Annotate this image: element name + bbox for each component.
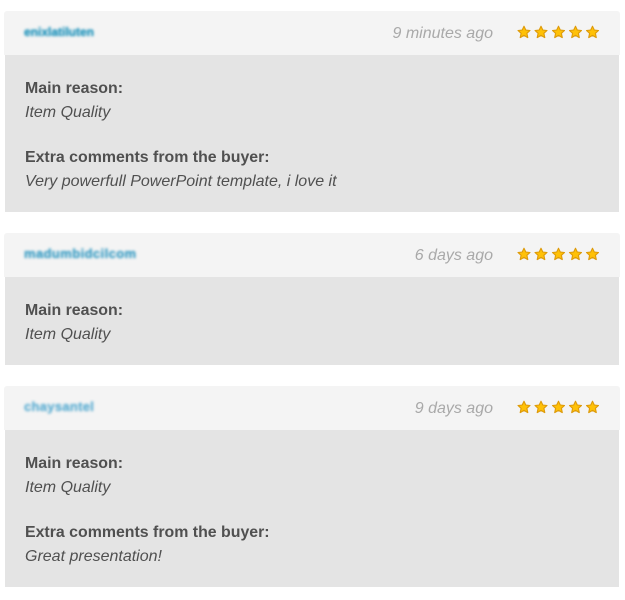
- main reason label: Main reason:: [25, 80, 123, 97]
- blurred username: madumbidcilcom: [24, 246, 137, 261]
- buyer comment: Great presentation!: [25, 548, 162, 565]
- icon: five star rating: [518, 400, 599, 414]
- card 1 body: [5, 55, 619, 212]
- blurred username: chaysantel: [24, 399, 94, 414]
- card 3 header: [4, 386, 620, 430]
- icon: five star rating: [518, 26, 599, 38]
- card 2 header: [4, 233, 620, 277]
- main reason label: Main reason:: [25, 455, 123, 472]
- blurred username: enixlatiluten: [24, 25, 94, 39]
- icon: five star rating: [517, 248, 600, 260]
- main reason label: Main reason:: [25, 302, 123, 319]
- timestamp: 6 days ago: [415, 247, 493, 264]
- card 2 body: [5, 277, 619, 365]
- review card 1: [4, 11, 620, 212]
- extra comments label: Extra comments from the buyer:: [25, 149, 270, 166]
- extra comments label: Extra comments from the buyer:: [25, 524, 270, 541]
- main reason value: Item Quality: [25, 479, 110, 496]
- main reason value: Item Quality: [25, 104, 110, 121]
- review card 3: [4, 386, 620, 587]
- timestamp: 9 minutes ago: [392, 25, 493, 42]
- card 1 header: [4, 11, 620, 55]
- main reason value: Item Quality: [25, 326, 110, 343]
- timestamp: 9 days ago: [415, 400, 493, 417]
- card 3 body: [5, 430, 619, 587]
- buyer comment: Very powerfull PowerPoint template, i love it: [25, 173, 337, 190]
- review card 2: [4, 233, 620, 365]
